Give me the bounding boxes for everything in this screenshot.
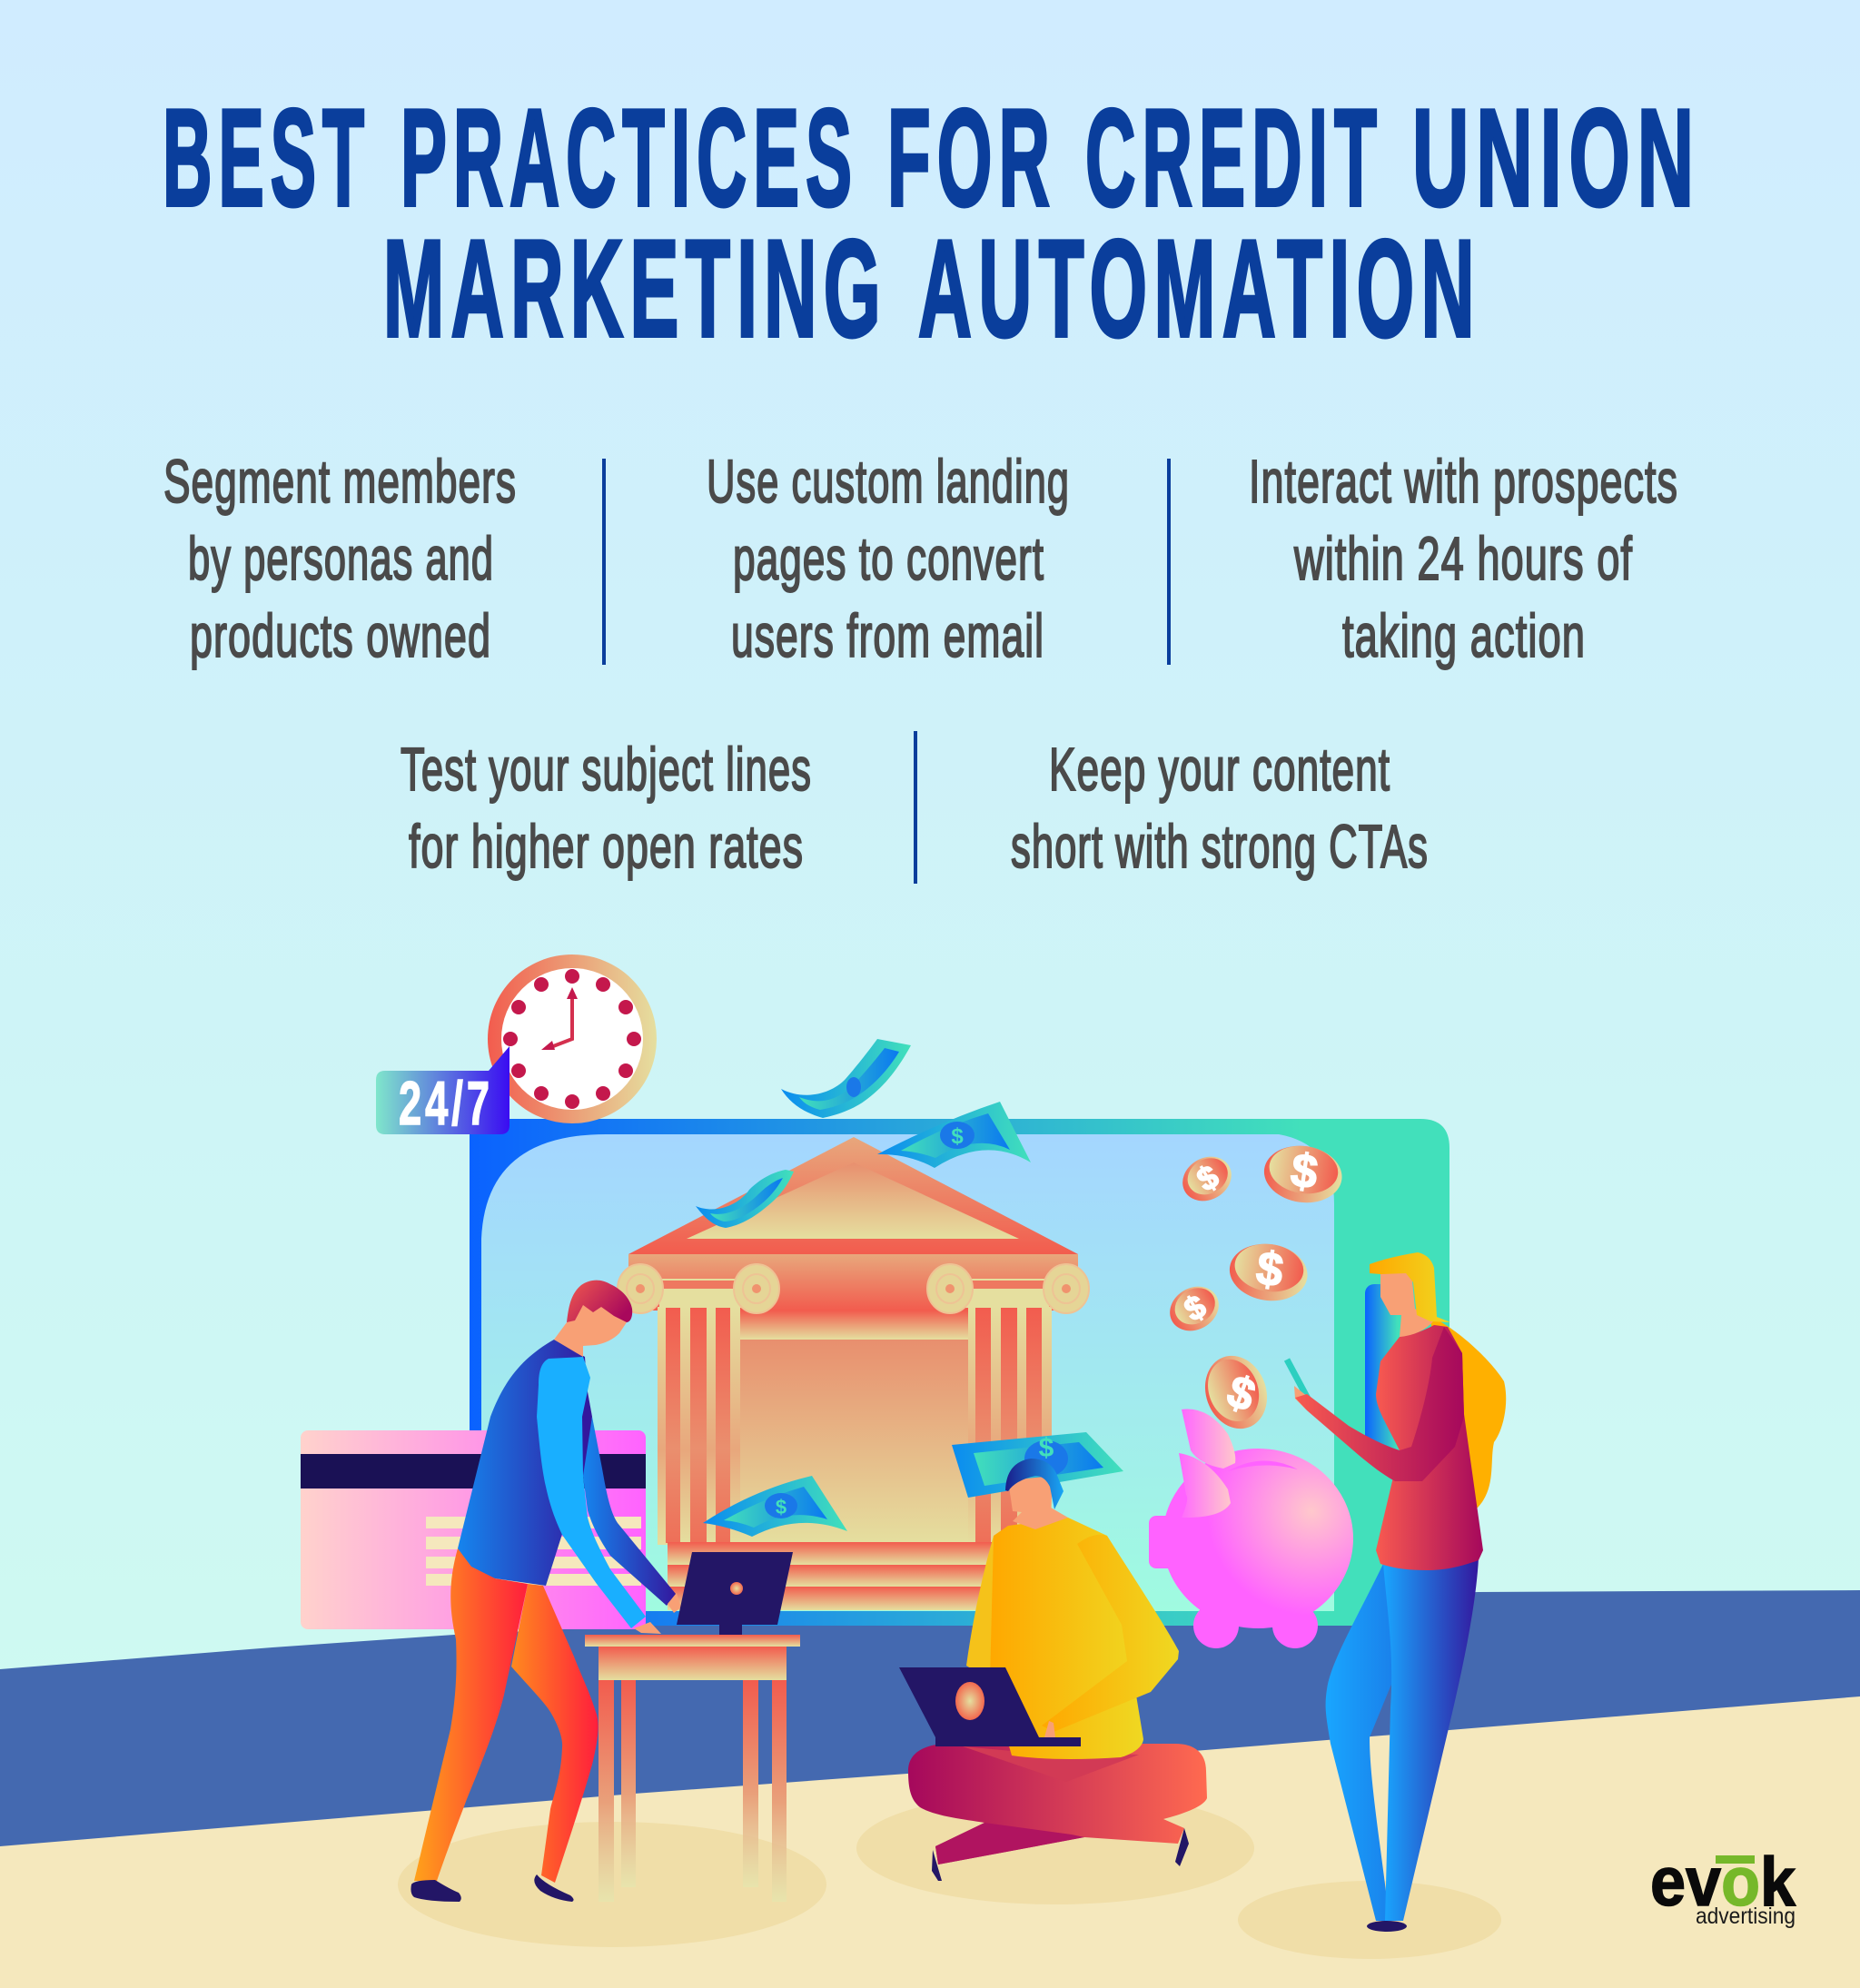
table body <box>599 1647 787 1680</box>
coin small middle: $ <box>1178 1287 1212 1329</box>
woman back leg <box>1326 1564 1453 1921</box>
title: MARKETING <box>383 212 887 366</box>
piggy feet <box>1193 1603 1318 1648</box>
practice: segment members: by personas and <box>188 525 494 593</box>
bank entablature <box>628 1254 1078 1310</box>
woman face and neck <box>1380 1272 1434 1337</box>
coin small top: $ <box>1191 1157 1225 1199</box>
credit card <box>301 1430 646 1629</box>
piggy coin slot <box>1228 1460 1298 1471</box>
practice: short content <box>1011 736 1429 881</box>
seated person <box>899 1459 1207 1881</box>
seated face and neck <box>1008 1476 1068 1529</box>
table legs <box>599 1680 787 1902</box>
evok advertising logo: advertising <box>1696 1904 1796 1929</box>
bank capitals <box>618 1264 1089 1313</box>
man front leg <box>414 1548 528 1881</box>
title: BEST <box>163 81 371 235</box>
standing man <box>411 1281 681 1902</box>
computer screen frame <box>470 1119 1449 1626</box>
seated arm gap <box>1123 1625 1140 1661</box>
seated legs <box>908 1744 1207 1864</box>
practice: segment members <box>163 448 517 670</box>
woman back hair <box>1430 1317 1506 1509</box>
24/7 badge: 24/7 <box>399 1069 493 1138</box>
ground: blue band <box>0 1590 1860 1871</box>
seated right arm <box>1042 1535 1179 1732</box>
flying bill: on roof <box>696 1170 794 1228</box>
title: PRACTICES <box>401 81 858 235</box>
flying bill: behind seated person <box>952 1432 1123 1498</box>
practice: interact with prospects: taking action <box>1342 602 1586 670</box>
seated hand <box>1044 1721 1055 1737</box>
bank right column <box>968 1307 1052 1545</box>
man face and neck <box>554 1299 627 1357</box>
man near arm <box>537 1357 646 1628</box>
title: CREDIT <box>1085 81 1383 235</box>
coin falling <box>1195 1347 1278 1438</box>
piggy body <box>1162 1449 1353 1628</box>
bank pediment <box>628 1137 1078 1254</box>
woman arm <box>1295 1327 1464 1481</box>
piggy bank <box>1149 1409 1353 1648</box>
woman front leg <box>1383 1558 1479 1921</box>
practice: landing pages: users from email <box>731 602 1044 670</box>
woman front hair <box>1370 1252 1450 1322</box>
table with laptop <box>585 1552 800 1902</box>
title: FOR <box>887 81 1056 235</box>
seated hair <box>1005 1459 1064 1509</box>
screen inner area <box>481 1134 1334 1611</box>
flying bill: over bank steps <box>703 1476 847 1537</box>
seated torso <box>990 1518 1143 1759</box>
man shoes <box>411 1874 574 1902</box>
coin large top <box>1261 1140 1346 1208</box>
man back leg <box>511 1584 599 1883</box>
coin small top <box>1174 1148 1240 1210</box>
evok advertising logo: evok <box>1650 1844 1796 1921</box>
coin large top: $ <box>1288 1143 1321 1200</box>
man hair <box>567 1281 632 1322</box>
best practices text <box>163 448 1678 881</box>
woman top <box>1376 1325 1483 1570</box>
coin large middle: $ <box>1253 1241 1287 1298</box>
table top <box>585 1635 800 1647</box>
flying bill: over bank steps: $ <box>776 1496 787 1518</box>
flying bill: top right <box>877 1102 1031 1168</box>
bank steps <box>668 1542 1058 1610</box>
bank wall <box>740 1340 968 1544</box>
24/7 badge <box>376 1046 510 1138</box>
practice: segment members: Segment members <box>163 448 517 516</box>
seated shoes <box>932 1828 1189 1881</box>
coin small middle <box>1162 1278 1227 1340</box>
piggy ear front <box>1179 1453 1231 1518</box>
practice: interact with prospects: within 24 hours of <box>1293 525 1633 593</box>
ground: sand floor <box>0 1696 1860 1988</box>
piggy ear back <box>1182 1409 1235 1469</box>
woman shoe <box>1367 1921 1407 1932</box>
laptop on table <box>677 1552 793 1636</box>
man far arm <box>583 1417 676 1606</box>
title <box>163 81 1701 366</box>
woman phone <box>1287 1360 1308 1399</box>
practice: landing pages <box>707 448 1070 670</box>
flying bill: top right: $ <box>951 1124 964 1149</box>
seated laptop <box>899 1667 1081 1746</box>
practice: subject lines <box>401 736 812 881</box>
woman phone-side panel <box>1365 1284 1403 1457</box>
practice: landing pages: pages to convert <box>733 525 1044 593</box>
practice: landing pages: Use custom landing <box>707 448 1070 516</box>
man jacket <box>458 1340 592 1586</box>
bank building <box>618 1137 1089 1610</box>
bank left column <box>658 1307 740 1545</box>
practice: short content: short with strong CTAs <box>1011 813 1429 881</box>
practice: interact with prospects <box>1249 448 1678 670</box>
practice: segment members: products owned <box>190 602 491 670</box>
practice: short content: Keep your content <box>1049 736 1390 804</box>
woman <box>1287 1252 1506 1932</box>
woman hand <box>1294 1386 1308 1409</box>
coins <box>1162 1140 1346 1438</box>
piggy snout <box>1149 1516 1194 1568</box>
floor shadow: woman <box>1238 1881 1501 1959</box>
wall clock <box>488 954 657 1123</box>
floor shadow: seated person <box>856 1792 1254 1904</box>
flying bill: top curved <box>781 1039 911 1118</box>
floor shadow: standing man <box>398 1822 826 1947</box>
coin falling: $ <box>1221 1365 1262 1421</box>
flying bill: behind seated person: $ <box>1039 1433 1054 1463</box>
practice: subject lines: for higher open rates <box>409 813 804 881</box>
coin large middle <box>1226 1238 1311 1306</box>
man hands <box>634 1593 681 1634</box>
practice: subject lines: Test your subject lines <box>401 736 812 804</box>
seated left arm <box>966 1536 1008 1680</box>
